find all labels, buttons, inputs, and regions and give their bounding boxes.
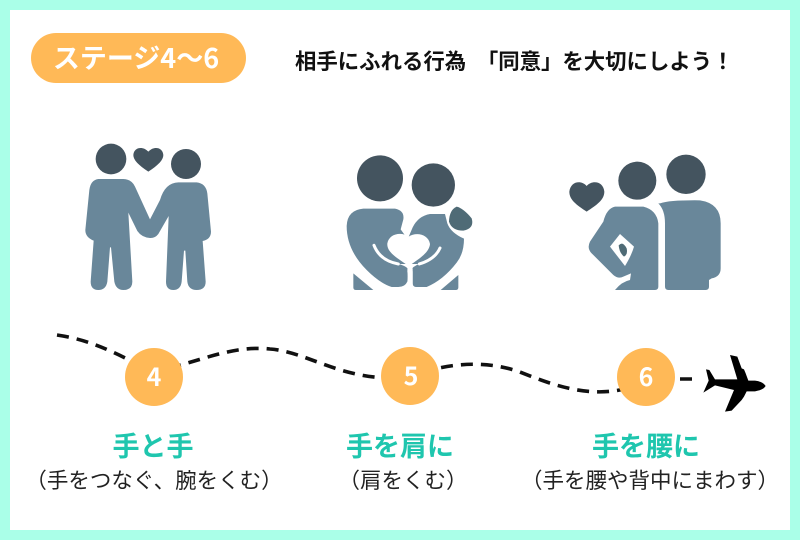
icon: couple with arm around waist <box>569 155 721 290</box>
step 4 label: （手をつなぐ、腕をくむ） <box>25 464 283 495</box>
header badge: stage 4-6 <box>31 33 246 83</box>
icon: airplane <box>703 355 766 412</box>
step marker 5: 5 <box>404 357 418 393</box>
step 6 label: 手を腰に <box>592 425 700 464</box>
dashed flight path <box>57 335 696 392</box>
step 4 label: 手と手 <box>112 425 194 464</box>
step marker 5 <box>381 347 439 405</box>
step 6 label: （手を腰や背中にまわす） <box>521 464 779 495</box>
step marker 4 <box>125 348 183 406</box>
step marker 4: 4 <box>147 358 162 394</box>
header badge: stage 4-6: ステージ4〜6 <box>53 37 219 76</box>
step 4 label <box>25 425 283 495</box>
step 6 label <box>521 425 779 495</box>
heading text: 相手にふれる行為 「同意」を大切にしよう！ <box>295 45 734 76</box>
step 5 label <box>338 425 468 495</box>
step marker 6: 6 <box>639 358 653 394</box>
step 5 label: 手を肩に <box>346 425 454 464</box>
icon: couple holding hands <box>85 144 211 290</box>
step 5 label: （肩をくむ） <box>338 464 468 495</box>
icon: couple with arms on shoulders <box>347 155 472 290</box>
step marker 6 <box>617 348 675 406</box>
